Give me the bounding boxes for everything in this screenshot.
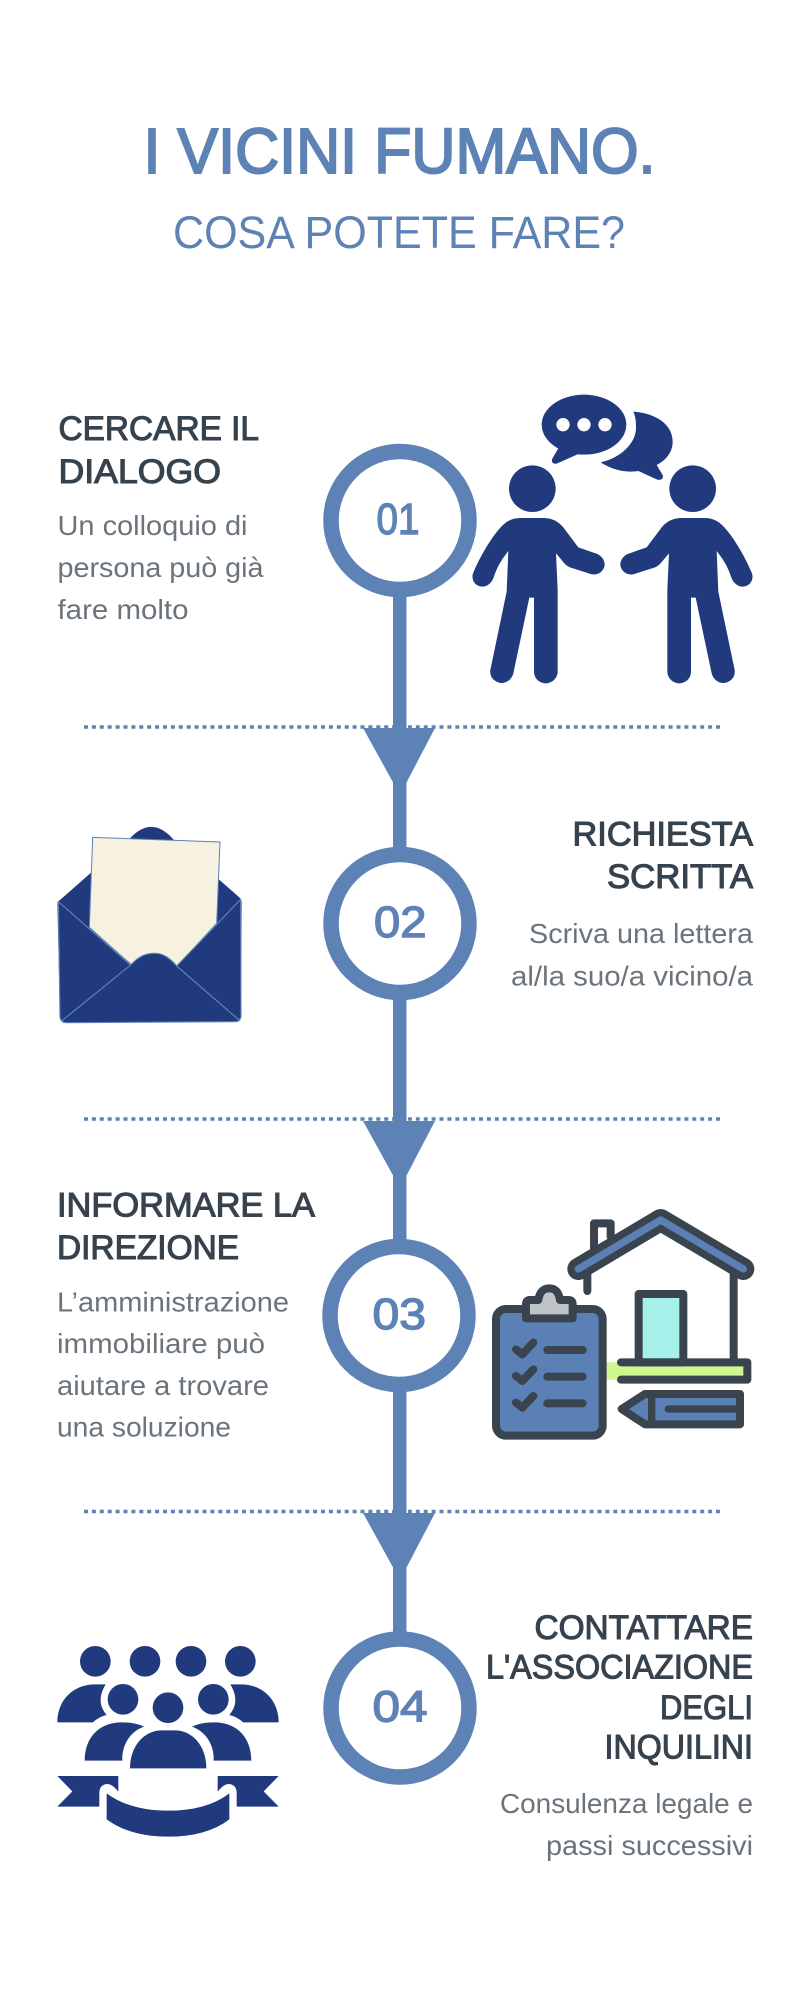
number circle 02: 02: [374, 898, 426, 947]
text block: step 1: Un colloquio di: [58, 510, 248, 541]
number circle 02: [331, 854, 469, 992]
text block: step 4: passi successivi: [546, 1830, 753, 1861]
heading: step 2: RICHIESTA: [572, 816, 753, 854]
heading: step 4: DEGLI: [660, 1689, 753, 1727]
heading: step 1: CERCARE IL: [58, 410, 259, 448]
panel: step 4: [57, 1555, 753, 1861]
connector line 1: [393, 590, 406, 852]
divider 3: [84, 1510, 720, 1513]
panel: step 3: [57, 1163, 747, 1517]
connector line 2b: [393, 995, 406, 1125]
heading: step 4: INQUILINI: [604, 1728, 753, 1766]
text block: step 3: una soluzione: [57, 1412, 231, 1442]
divider 2: [84, 1117, 720, 1121]
text block: step 3: L’amministrazione: [57, 1286, 289, 1318]
text block: step 1: fare molto: [58, 594, 188, 625]
text block: step 4: [500, 1788, 753, 1861]
heading: step 3: INFORMARE LA: [57, 1186, 315, 1224]
text block: step 3: immobiliare può: [57, 1328, 265, 1359]
icon: group of people with banner: [57, 1646, 279, 1837]
text block: step 2: Scriva una lettera: [529, 918, 753, 949]
number circle 04: 04: [372, 1682, 428, 1732]
heading: step 3: [57, 1186, 315, 1267]
divider 1: [84, 725, 720, 729]
subtitle: COSA POTETE FARE?: [173, 207, 625, 258]
heading: step 4: [486, 1609, 753, 1766]
heading: step 4: CONTATTARE: [534, 1609, 753, 1647]
arrow 3: [363, 1513, 435, 1580]
heading: step 3: DIREZIONE: [57, 1229, 239, 1267]
number circle 01: 01: [376, 495, 420, 544]
heading: step 2: [572, 816, 753, 896]
number circle 03: 03: [372, 1290, 426, 1339]
heading: step 2: SCRITTA: [607, 858, 753, 896]
text block: step 4: Consulenza legale e: [500, 1788, 753, 1819]
icon: house and checklist: [496, 1220, 747, 1436]
connector line 2: [393, 770, 406, 850]
panel: step 2: [57, 770, 753, 1125]
number circle 01: [331, 452, 469, 590]
connector line 4: [393, 1555, 406, 1637]
arrow 1: [363, 728, 435, 795]
text block: step 2: al/la suo/a vicino/a: [511, 960, 753, 992]
text block: step 3: aiutare a trovare: [57, 1370, 269, 1401]
heading: step 1: DIALOGO: [58, 453, 221, 491]
arrow 2: [363, 1121, 435, 1188]
heading: step 4: L'ASSOCIAZIONE: [486, 1648, 753, 1686]
text block: step 1: persona può già: [58, 552, 264, 583]
icon: envelope with letter: [57, 827, 242, 1023]
connector line 3: [393, 1163, 406, 1244]
connector line 3b: [393, 1387, 406, 1517]
heading: step 1: [58, 410, 259, 491]
text block: step 3: [57, 1286, 289, 1442]
number circle 04: [331, 1639, 469, 1777]
title: I VICINI FUMANO.: [144, 115, 656, 187]
text block: step 1: [58, 510, 264, 625]
icon: two people talking: [472, 395, 753, 683]
number circle 03: [330, 1246, 468, 1384]
panel: step 1: [58, 395, 753, 852]
text block: step 2: [511, 918, 753, 992]
